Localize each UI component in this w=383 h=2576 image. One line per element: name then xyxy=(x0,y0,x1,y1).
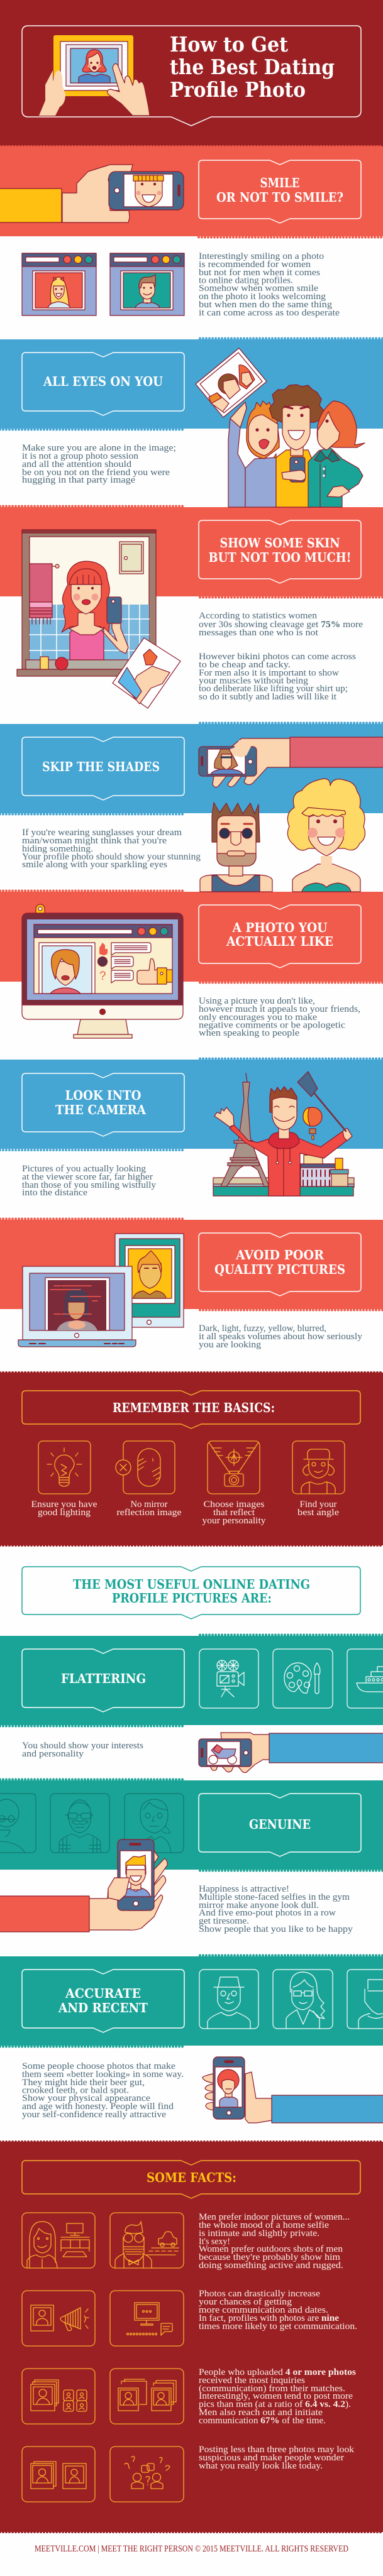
text: fact 2: In fact, profiles with photos are nine xyxy=(199,2313,340,2323)
icon: confused people with question marks xyxy=(110,2447,184,2502)
icon: hand with phone and motorcycle xyxy=(199,1733,383,1772)
text: genuine advice: mirror make anyone look dull. xyxy=(199,1900,319,1910)
text: photo you like advice: only encourages you to make xyxy=(199,1012,317,1022)
icon: film camera xyxy=(199,1649,258,1708)
text: accurate advice xyxy=(22,2061,184,2120)
heading: accurate and recent xyxy=(22,1970,184,2032)
heading: skip the shades: SKIP THE SHADES xyxy=(42,759,160,774)
heading: avoid poor quality pictures: QUALITY PICTURES xyxy=(214,1262,345,1277)
text: look into camera advice: Pictures of you actually looking xyxy=(22,1164,146,1174)
text: all eyes advice: Make sure you are alone in the image; xyxy=(22,443,176,453)
text: skip shades advice xyxy=(22,828,201,870)
icon: hand with phone and woman in sunglasses xyxy=(199,737,383,787)
heading: avoid poor quality pictures: AVOID POOR xyxy=(235,1247,325,1263)
panel: facts background xyxy=(0,2142,383,2532)
text: skip shades advice: smile along with your sparkling eyes xyxy=(22,860,167,870)
icon: profile photo and megaphone xyxy=(22,2291,95,2346)
text: fact 3: Interestingly, women tend to post more xyxy=(199,2391,353,2401)
heading: a photo you actually like: ACTUALLY LIKE xyxy=(226,934,333,949)
text: smile advice: but not for men when it comes xyxy=(199,268,320,278)
text: all eyes advice: and all the attention should xyxy=(22,459,132,469)
heading: flattering: FLATTERING xyxy=(61,1671,146,1686)
text: basics labels: reflection image xyxy=(117,1508,181,1518)
icon: hipster man and car xyxy=(110,2213,184,2268)
text: skip shades advice: man/woman might think that you're xyxy=(22,836,167,846)
icon: bathroom mirror selfie xyxy=(17,530,180,708)
text: poor quality advice: Dark, light, fuzzy, yellow, blurred, xyxy=(199,1324,326,1334)
panel: header background xyxy=(0,0,383,147)
text: look into camera advice xyxy=(22,1164,157,1198)
heading: smile or not to smile: OR NOT TO SMILE? xyxy=(216,190,343,205)
icon: two framed photos xyxy=(22,2447,95,2502)
text: fact 1: Men prefer indoor pictures of women... xyxy=(199,2212,350,2222)
text: flattering advice xyxy=(22,1741,143,1759)
panel: poor quality band xyxy=(0,1219,383,1310)
text: fact 1 xyxy=(199,2212,350,2271)
icon: man with sunglasses and stubble xyxy=(200,803,272,892)
text: fact 3: communication 67% of the time. xyxy=(199,2416,326,2426)
text: all eyes advice: it is not a group photo session xyxy=(22,451,139,461)
heading: smile or not to smile xyxy=(199,160,361,223)
text: skip shades advice: Your profile photo should show your stunning xyxy=(22,852,201,862)
heading: some facts xyxy=(22,2161,360,2198)
text: photo you like advice xyxy=(199,996,360,1038)
heading: genuine: GENUINE xyxy=(249,1817,311,1832)
icon: portrait with hat and beard xyxy=(199,1970,258,2029)
text: show skin advice xyxy=(199,611,363,702)
text: basics labels: Find your xyxy=(299,1499,337,1510)
text: accurate advice: them seem «better looking» in some way. xyxy=(22,2069,184,2080)
heading: most useful online dating profile pictures xyxy=(22,1567,360,1619)
heading: look into the camera xyxy=(22,1073,184,1136)
heading: look into the camera: THE CAMERA xyxy=(55,1102,147,1117)
text: fact 4: suspicious and make people wonder xyxy=(199,2453,344,2463)
text: accurate advice: and age with honesty. People will find xyxy=(22,2102,174,2112)
heading: some facts: SOME FACTS: xyxy=(147,2170,236,2185)
text: fact 3 xyxy=(199,2367,356,2426)
icon: ship xyxy=(347,1649,383,1708)
heading: a photo you actually like: A PHOTO YOU xyxy=(232,920,328,935)
text: fact 3: Men also reach out and initiate xyxy=(199,2408,323,2418)
icon: light bulb xyxy=(38,1441,91,1494)
text: fact 2: Photos can drastically increase xyxy=(199,2289,320,2299)
icon: woman with yellow curly hair xyxy=(287,779,365,892)
text: show skin advice: too deliberate like lifting your shirt up; xyxy=(199,684,348,694)
title callout xyxy=(22,26,361,126)
text: show skin advice: According to statistics women xyxy=(199,611,318,621)
text: accurate advice: your self-confidence really attractive xyxy=(22,2110,166,2120)
icon: palette and brush xyxy=(273,1649,333,1708)
heading: show some skin: BUT NOT TOO MUCH! xyxy=(209,550,351,565)
icon: tablet with yellow portrait xyxy=(115,1234,184,1327)
text: show skin advice: over 30s showing cleavage get 75% more xyxy=(199,620,363,630)
heading: genuine xyxy=(199,1794,361,1856)
text: photo you like advice: when speaking to people xyxy=(199,1028,299,1038)
text: fact 1: Women prefer outdoors shots of men xyxy=(199,2244,343,2254)
text: smile advice: Interestingly smiling on a photo xyxy=(199,251,324,261)
text: look into camera advice: than those of you smiling wistfully xyxy=(22,1180,157,1190)
text: genuine advice xyxy=(199,1884,353,1934)
text: fact 2 xyxy=(199,2289,357,2332)
icon: hand holding phone with red-haired woman xyxy=(203,2057,383,2123)
panel: genuine band xyxy=(0,1780,383,1870)
text: show skin advice: so do it subtly and ladies will like it xyxy=(199,692,336,702)
text: accurate advice: Show your physical appearance xyxy=(22,2093,150,2103)
text: look into camera advice: at the viewer score far, far higher xyxy=(22,1172,153,1182)
text: smile advice: it can come across as too desperate xyxy=(199,308,340,318)
text: fact 2: more communication and dates. xyxy=(199,2305,328,2315)
heading: a photo you actually like xyxy=(199,905,361,968)
text: fact 4: what you really look like today. xyxy=(199,2461,323,2471)
text: flattering advice: and personality xyxy=(22,1749,84,1759)
heading: all eyes on you: ALL EYES ON YOU xyxy=(43,374,163,389)
panel: photo you like band xyxy=(0,891,383,983)
title callout: the Best Dating xyxy=(170,55,335,79)
text: smile advice: is recommended for women xyxy=(199,260,311,270)
panel: accurate band xyxy=(0,1956,383,2046)
text: smile advice: to online dating profiles. xyxy=(199,275,293,285)
text: basics labels: Ensure you have xyxy=(31,1499,97,1510)
text: photo you like advice: negative comments or be apologetic xyxy=(199,1021,345,1031)
text: basics labels: your personality xyxy=(203,1516,266,1526)
text: poor quality advice: it all speaks volumes about how seriously xyxy=(199,1332,363,1342)
icon: computer monitor with profile xyxy=(22,904,183,1038)
text: fact 3: received the most inquiries xyxy=(199,2376,305,2386)
heading: skip the shades xyxy=(22,737,184,800)
heading: show some skin xyxy=(199,520,361,583)
icon: browser window, smiling woman xyxy=(22,253,96,315)
text: accurate advice: Some people choose photos that make xyxy=(22,2061,175,2071)
text: fact 1: doing something active and rugged. xyxy=(199,2261,343,2271)
text: basics labels: best angle xyxy=(297,1508,339,1518)
text: fact 1: It's sexy! xyxy=(199,2237,230,2247)
heading: remember the basics xyxy=(22,1391,360,1428)
text: skip shades advice: hiding something. xyxy=(22,844,93,854)
text: all eyes advice: hugging in that party image xyxy=(22,475,135,485)
heading: avoid poor quality pictures xyxy=(199,1233,361,1296)
title callout: Profile Photo xyxy=(170,77,306,102)
icon: stack of photos and small portraits xyxy=(22,2369,95,2424)
text: look into camera advice: into the distance xyxy=(22,1188,87,1198)
text: all eyes advice xyxy=(22,443,176,485)
heading: look into the camera: LOOK INTO xyxy=(65,1088,141,1103)
icon: group selfie with photo xyxy=(196,348,365,507)
icon: portrait bearded man xyxy=(347,1970,383,2029)
text: accurate advice: They might hide their beer gut, xyxy=(22,2078,145,2088)
icon: two stacks of photos xyxy=(110,2369,184,2424)
text: all eyes advice: be on you not on the friend you were xyxy=(22,468,170,478)
icon: selfie in Paris xyxy=(213,1072,354,1196)
text: fact 3: pics than men (at a ratio of 6.4 vs. 4.2 ). xyxy=(199,2399,351,2409)
text: smile advice xyxy=(199,251,340,318)
text: accurate advice: crooked teeth, or bald spot. xyxy=(22,2085,129,2095)
panel: all eyes band xyxy=(0,338,383,430)
text: show skin advice: For men also it is important to show xyxy=(199,668,340,678)
icon: hand holding phone with happy man xyxy=(0,1839,167,1932)
panel: look into camera band xyxy=(0,1058,383,1150)
text: basics labels: No mirror xyxy=(131,1499,168,1510)
panel: basics background xyxy=(0,1373,383,1545)
icon: laptop with glitched portrait xyxy=(18,1266,136,1347)
text: show skin advice: However bikini photos can come across xyxy=(199,652,356,662)
panel: skip shades band xyxy=(0,723,383,814)
text: poor quality advice xyxy=(199,1324,363,1350)
text: basics labels: Choose images xyxy=(204,1499,265,1510)
panel: flattering band xyxy=(0,1635,383,1726)
icon: camera necklace xyxy=(208,1441,260,1494)
text: poor quality advice: you are looking xyxy=(199,1340,261,1350)
text: smile advice: on the photo it looks welcoming xyxy=(199,292,326,302)
text: fact 1: because they're probably show him xyxy=(199,2252,341,2262)
text: basics labels: good lighting xyxy=(38,1508,91,1518)
heading: most useful online dating profile pictures: PROFILE PICTURES ARE: xyxy=(112,1591,272,1606)
icon: woman at home with desk xyxy=(22,2213,95,2268)
text: smile advice: but when men do the same thing xyxy=(199,300,332,310)
text: fact 2: your chances of getting xyxy=(199,2297,292,2307)
text: genuine advice: get tiresome. xyxy=(199,1916,249,1926)
icon: portrait woman with glasses xyxy=(273,1970,333,2029)
text: fact 3: (communication) from their matches. xyxy=(199,2384,345,2394)
text: photo you like advice: however much it appeals to your friends, xyxy=(199,1004,360,1014)
text: basics labels xyxy=(31,1499,339,1526)
title callout: How to Get xyxy=(170,32,289,57)
text: genuine advice: Multiple stone-faced selfies in the gym xyxy=(199,1892,350,1902)
text: fact 3: People who uploaded 4 or more photos xyxy=(199,2367,356,2377)
icon: browser window, smiling man xyxy=(110,253,184,315)
icon: hand with phone, smiling boy xyxy=(0,165,184,222)
text: skip shades advice: If you're wearing sunglasses your dream xyxy=(22,828,182,838)
heading: remember the basics: REMEMBER THE BASICS: xyxy=(113,1400,275,1415)
heading: flattering xyxy=(22,1649,184,1712)
text: genuine advice: Show people that you like to be happy xyxy=(199,1924,353,1934)
icon: monitor with chat xyxy=(110,2291,184,2346)
icon: computer monitor with profile: ? xyxy=(99,970,106,983)
text: flattering advice: You should show your interests xyxy=(22,1741,143,1751)
heading: accurate and recent: ACCURATE xyxy=(65,1986,141,2001)
text: smile advice: Somehow when women smile xyxy=(199,283,318,293)
heading: accurate and recent: AND RECENT xyxy=(58,2000,148,2015)
text: genuine advice: Happiness is attractive! xyxy=(199,1884,289,1894)
heading: smile or not to smile: SMILE xyxy=(260,175,299,190)
heading: most useful online dating profile pictures: THE MOST USEFUL ONLINE DATING xyxy=(73,1577,310,1592)
text: fact 2: times more likely to get communication. xyxy=(199,2321,357,2332)
text: show skin advice: your muscles without being xyxy=(199,676,308,686)
text: show skin advice: messages than one who is not xyxy=(199,628,318,638)
icon: no mirror xyxy=(116,1441,175,1494)
icon: person with hat xyxy=(292,1441,345,1494)
text: fact 1: is intimate and slightly private. xyxy=(199,2228,319,2239)
text: basics labels: that reflect xyxy=(213,1508,255,1518)
heading: show some skin: SHOW SOME SKIN xyxy=(220,535,340,551)
text: fact 4: Posting less than three photos may look xyxy=(199,2445,355,2455)
text: photo you like advice: Using a picture you don't like, xyxy=(199,996,315,1006)
icons: genuine portraits in dark teal xyxy=(0,1794,184,1853)
panel: show skin band xyxy=(0,507,383,597)
text: fact 4 xyxy=(199,2445,355,2471)
text: show skin advice: to be cheap and tacky. xyxy=(199,660,291,670)
icon: tablet held by hands xyxy=(39,35,150,116)
text: genuine advice: And five emo-pout photos in a row xyxy=(199,1908,336,1918)
heading: all eyes on you xyxy=(22,353,184,415)
text: fact 1: the whole mood of a home selfie xyxy=(199,2220,329,2230)
panel: smile band xyxy=(0,146,383,238)
